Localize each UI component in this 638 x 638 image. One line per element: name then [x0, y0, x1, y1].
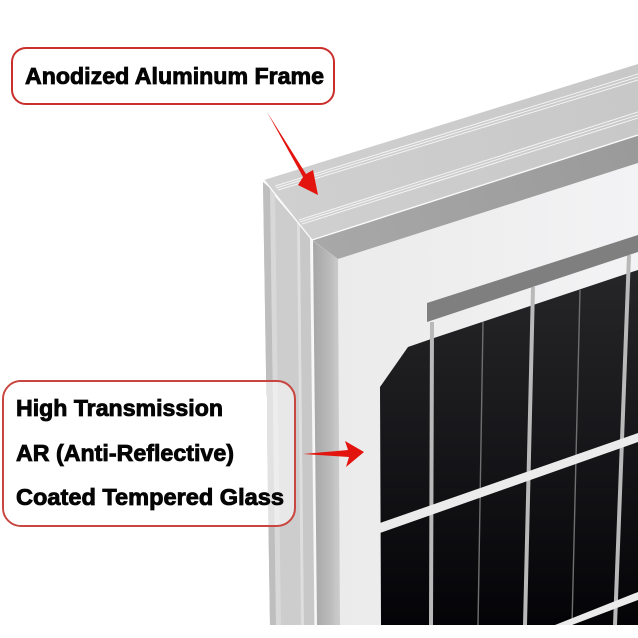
aluminum frame: inner bevel [312, 135, 638, 259]
callout: anti-reflective coated glass [3, 381, 295, 526]
aluminum frame: top face [264, 64, 638, 240]
aluminum frame: side face [263, 182, 340, 625]
callout text: first line: High Transmission [16, 395, 223, 421]
arrow: to aluminum frame [267, 112, 318, 195]
panel: tempered glass surface [338, 163, 638, 625]
callout: anodized aluminum frame [12, 48, 334, 104]
callout text: second line: AR (Anti-Reflective) [16, 440, 234, 466]
solar cell array [380, 255, 638, 625]
callout text: Anodized Aluminum Frame [25, 63, 324, 89]
callout text: third line: Coated Tempered Glass [16, 484, 284, 510]
bus bar [427, 235, 638, 322]
arrow: to glass [303, 441, 364, 467]
solar panel illustration [263, 64, 638, 625]
